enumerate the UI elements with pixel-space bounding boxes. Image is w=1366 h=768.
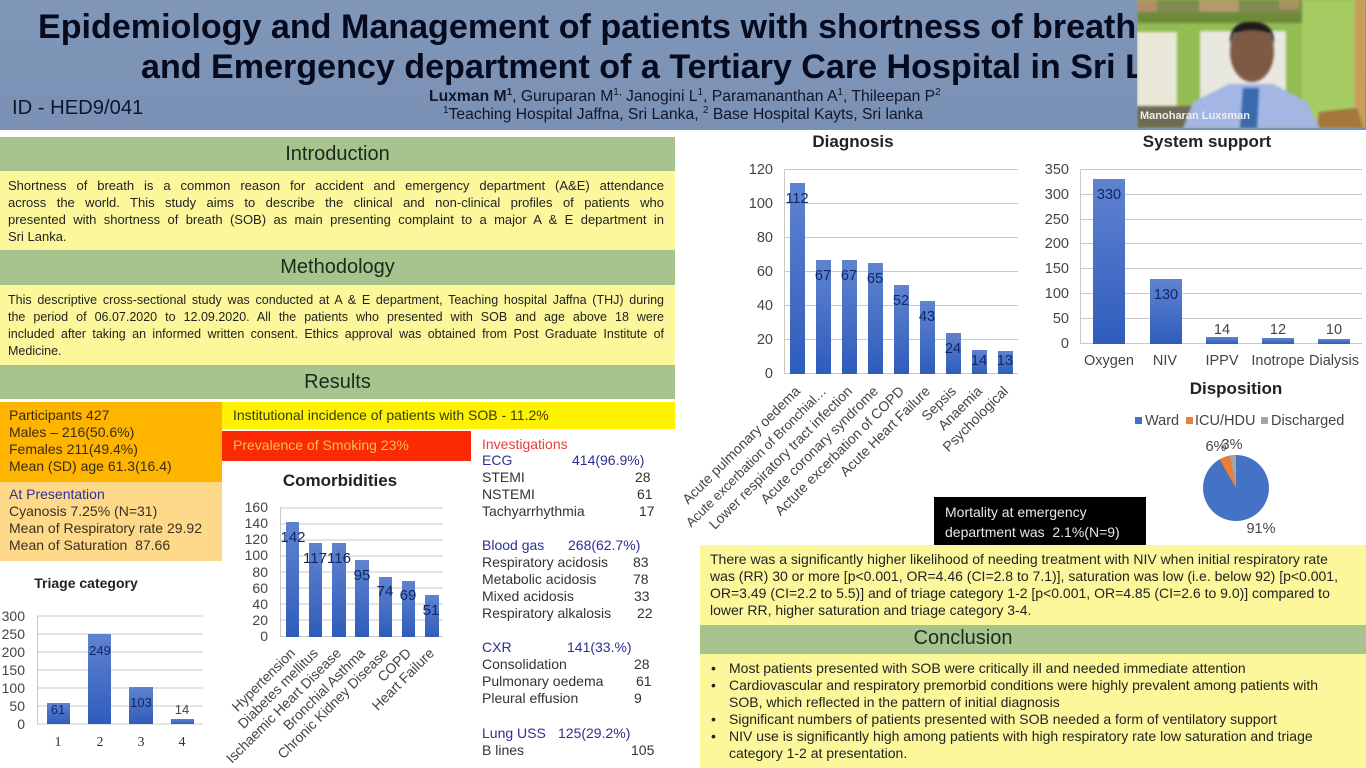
- conclusion list: [700, 654, 1366, 768]
- callout: institutional incidence: Institutional incidence of patients with SOB - 11.2%: [233, 407, 549, 423]
- comorbidities chart title: Comorbidities: [283, 471, 397, 490]
- webcam presenter video: [1137, 0, 1365, 128]
- disposition legend: Discharged: [1271, 413, 1344, 429]
- chart: triage category: 249: [89, 643, 111, 658]
- chart: comorbidities: Hypertension: [228, 645, 298, 714]
- chart: diagnosis: 43: [919, 309, 935, 325]
- conclusion list: category 1-2 at presentation.: [729, 745, 907, 761]
- conclusion list: •: [711, 677, 716, 693]
- investigations list: Lung USS: [482, 725, 546, 741]
- disposition legend: Ward: [1145, 413, 1179, 429]
- chart: diagnosis: 67: [815, 268, 831, 284]
- chart: diagnosis: 120: [749, 162, 773, 178]
- chart: diagnosis: [679, 132, 1018, 532]
- chart: comorbidities: 69: [400, 587, 416, 604]
- investigations list: 28: [634, 656, 650, 672]
- investigations list: Metabolic acidosis: [482, 571, 596, 587]
- heading: methodology: [0, 250, 675, 285]
- chart: diagnosis: Actute excerbation of COPD: [771, 383, 907, 518]
- findings text: was (RR) 30 or more [p<0.001, OR=4.46 (CI=2.8 to 7.1)], saturation was low (i.e. below 92) [p<0.001,: [710, 568, 1338, 584]
- chart: comorbidities: 0: [260, 628, 268, 644]
- investigations list: 17: [639, 503, 655, 519]
- investigations list: 125(29.2%): [558, 725, 630, 741]
- header band: [0, 0, 1366, 130]
- investigations list: Tachyarrhythmia: [482, 503, 585, 519]
- chart: comorbidities: COPD: [374, 645, 414, 685]
- chart: diagnosis: 100: [749, 196, 773, 212]
- investigations list: B lines: [482, 742, 524, 758]
- chart: triage category: 2: [96, 735, 104, 750]
- investigations list: 105: [631, 742, 654, 758]
- chart: comorbidities: Chronic Kidney Disease: [274, 645, 391, 762]
- investigations list: NSTEMI: [482, 486, 535, 502]
- chart: triage category: 103: [130, 695, 152, 710]
- conclusion list: •: [711, 660, 716, 676]
- chart: disposition pie: 6%: [1206, 439, 1227, 455]
- heading: results: Results: [304, 371, 371, 393]
- conclusion list: •: [711, 711, 716, 727]
- introduction text: [0, 171, 675, 250]
- participants box: Participants 427: [9, 407, 109, 423]
- investigations list: Investigations: [482, 436, 568, 452]
- chart: system support: 0: [1061, 336, 1069, 352]
- chart: system support: NIV: [1153, 353, 1177, 369]
- chart: comorbidities: 20: [252, 612, 268, 628]
- callout: smoking prevalence: [222, 431, 471, 461]
- chart: comorbidities: 74: [377, 583, 393, 600]
- callout: smoking prevalence: Prevalence of Smoking 23%: [233, 437, 409, 453]
- panel: methodology: [0, 250, 675, 365]
- investigations list: Blood gas: [482, 537, 544, 553]
- chart: diagnosis: 0: [765, 366, 773, 382]
- investigations list: 83: [633, 554, 649, 570]
- chart: diagnosis: 60: [757, 264, 773, 280]
- investigations list: Pulmonary oedema: [482, 673, 603, 689]
- conclusion list: SOB, which reflected in the pattern of initial diagnosis: [729, 694, 1060, 710]
- chart: comorbidities: 160: [245, 499, 268, 515]
- conclusion list: NIV use is significantly high among patients with high respiratory rate low saturation and triage: [729, 728, 1313, 744]
- methodology text: [0, 285, 675, 365]
- chart: system support: IPPV: [1205, 353, 1239, 369]
- heading: results: [0, 365, 675, 399]
- chart: system support: 50: [1053, 311, 1069, 327]
- chart: system support: 12: [1270, 322, 1286, 338]
- methodology text: Medicine.: [8, 344, 62, 358]
- chart: comorbidities: 100: [245, 547, 268, 563]
- conclusion list: •: [711, 728, 716, 744]
- conclusion list: Cardiovascular and respiratory premorbid conditions were highly prevalent among patients with: [729, 677, 1318, 693]
- chart: triage category: 61: [51, 702, 65, 717]
- at presentation box: [0, 482, 222, 561]
- chart: triage category: 1: [54, 735, 62, 750]
- investigations list: 61: [636, 673, 652, 689]
- diagnosis chart title: Diagnosis: [812, 132, 894, 151]
- chart: system support: 200: [1045, 236, 1069, 252]
- chart: system support: 150: [1045, 261, 1069, 277]
- investigations list: 33: [634, 588, 650, 604]
- chart: diagnosis: 14: [971, 353, 987, 369]
- investigations list: 9: [634, 690, 642, 706]
- chart: triage category: 300: [2, 608, 25, 624]
- panel: introduction: [0, 137, 675, 250]
- methodology text: included after taking an informed written consent. Ethics approval was obtained from Post Graduate Institute of: [8, 327, 664, 341]
- chart: diagnosis: Acute coronary syndrome: [757, 383, 881, 507]
- chart: system support: Oxygen: [1084, 353, 1134, 369]
- chart: diagnosis: Anaemia: [935, 383, 985, 433]
- pie slices: [1203, 455, 1269, 521]
- investigations list: Respiratory acidosis: [482, 554, 608, 570]
- investigations list: STEMI: [482, 469, 525, 485]
- callout: mortality: department was 2.1%(N=9): [945, 524, 1120, 540]
- callout: mortality: Mortality at emergency: [945, 504, 1087, 520]
- chart: disposition pie: [1135, 379, 1344, 537]
- chart: comorbidities: Diabetes mellitus: [234, 645, 321, 732]
- heading: conclusion: [700, 625, 1366, 654]
- chart: diagnosis: 13: [997, 353, 1013, 369]
- chart: comorbidities: 142: [280, 529, 306, 546]
- chart: diagnosis: Acute pulmonary oedema: [679, 383, 803, 507]
- introduction text: presented with shortness of breath (SOB) as main presenting complaint to a major A & E department in: [8, 212, 664, 227]
- chart: triage category: 200: [2, 644, 25, 660]
- chart: triage category: 0: [17, 716, 25, 732]
- disposition legend: [1135, 413, 1344, 429]
- callout: institutional incidence: [222, 402, 675, 429]
- investigations list: Respiratory alkalosis: [482, 605, 611, 621]
- chart: triage category: 14: [175, 702, 189, 717]
- investigations list: Consolidation: [482, 656, 567, 672]
- investigations list: 22: [637, 605, 653, 621]
- title: and Emergency department of a Tertiary Care Hospital in Sri Lanka: [141, 48, 1224, 86]
- chart: diagnosis: 112: [785, 191, 809, 207]
- chart: diagnosis: 40: [757, 298, 773, 314]
- chart: system support: 14: [1214, 322, 1230, 338]
- investigations list: ECG: [482, 452, 512, 468]
- chart: system support: Inotrope: [1251, 353, 1305, 369]
- affiliations: 1Teaching Hospital Jaffna, Sri Lanka, 2 Base Hospital Kayts, Sri lanka: [443, 105, 923, 123]
- chart: diagnosis: 52: [893, 293, 909, 309]
- methodology text: the period of 06.07.2020 to 12.09.2020. All the patients who presented with SOB and age above 18 were: [8, 310, 664, 324]
- findings text: OR=3.49 (CI=2.2 to 5.5)] and of triage category 1-2 [p<0.001, OR=4.85 (CI=2.6 to 9.0)] compared to: [710, 585, 1330, 601]
- chart: diagnosis: 67: [841, 268, 857, 284]
- chart: comorbidities: 117: [303, 550, 327, 567]
- chart: system support: 330: [1097, 187, 1121, 203]
- disposition chart title: Disposition: [1190, 379, 1282, 398]
- chart: comorbidities: 95: [354, 567, 370, 584]
- at presentation box: Mean of Respiratory rate 29.92: [9, 520, 202, 536]
- title: [38, 8, 1328, 86]
- chart: comorbidities: [223, 471, 443, 766]
- chart: diagnosis: Acute Heart Failure: [837, 383, 933, 479]
- heading: introduction: [0, 137, 675, 171]
- chart: system support: 100: [1045, 286, 1069, 302]
- introduction text: Sri Lanka.: [8, 229, 67, 244]
- heading: conclusion: Conclusion: [914, 627, 1012, 649]
- chart: triage category: 4: [178, 735, 186, 750]
- callout: mortality: [934, 497, 1146, 545]
- disposition legend: ICU/HDU: [1195, 413, 1255, 429]
- investigations list: CXR: [482, 639, 512, 655]
- conclusion list: Most patients presented with SOB were critically ill and needed immediate attention: [729, 660, 1246, 676]
- participants box: Males – 216(50.6%): [9, 424, 134, 440]
- investigations list: Pleural effusion: [482, 690, 578, 706]
- chart: comorbidities: Bronchial Asthma: [280, 645, 368, 733]
- chart: triage category: 250: [2, 626, 25, 642]
- chart: diagnosis: 65: [867, 271, 883, 287]
- chart: system support: 10: [1326, 322, 1342, 338]
- conclusion list: Significant numbers of patients presented with SOB needed a form of ventilatory support: [729, 711, 1277, 727]
- investigations list: 268(62.7%): [568, 537, 640, 553]
- investigations list: 28: [635, 469, 651, 485]
- chart: diagnosis: Acute excerbation of Bronchial…: [683, 384, 829, 530]
- chart: system support: 350: [1045, 162, 1069, 178]
- chart: triage category: 100: [2, 680, 25, 696]
- introduction text: across the world. This study aims to describe the clinical and non-clinical profiles of patients who: [8, 195, 664, 210]
- authors: Luxman M1, Guruparan M1, Janogini L1, Paramananthan A1, Thileepan P2: [429, 87, 941, 105]
- chart: triage category: 50: [9, 698, 25, 714]
- chart: comorbidities: Heart Failure: [369, 645, 437, 713]
- heading: introduction: Introduction: [285, 143, 390, 165]
- chart: comorbidities: 51: [423, 602, 439, 619]
- findings text: There was a significantly higher likelihood of needing treatment with NIV when initial respiratory rate: [710, 551, 1328, 567]
- chart: triage category: 3: [138, 735, 144, 750]
- chart: diagnosis: Lower respiratory tract infection: [706, 383, 855, 532]
- investigations list: 141(33.%): [567, 639, 632, 655]
- participants box: Females 211(49.4%): [9, 441, 138, 457]
- system support chart title: System support: [1143, 132, 1272, 151]
- investigations list: [482, 436, 655, 758]
- at presentation box: Cyanosis 7.25% (N=31): [9, 503, 157, 519]
- participants box: Mean (SD) age 61.3(16.4): [9, 458, 172, 474]
- investigations list: Mixed acidosis: [482, 588, 574, 604]
- chart: system support: 250: [1045, 212, 1069, 228]
- chart: comorbidities: 140: [245, 515, 268, 531]
- chart: triage category: [2, 575, 203, 750]
- chart: comorbidities: 60: [252, 580, 268, 596]
- chart: system support: [1045, 132, 1362, 369]
- poster id: ID - HED9/041: [12, 97, 143, 119]
- findings text: lower RR, higher saturation and triage category 3-4.: [710, 602, 1031, 618]
- introduction text: Shortness of breath is a common reason for accident and emergency department (A&E) attendance: [8, 178, 664, 193]
- chart: system support: 300: [1045, 187, 1069, 203]
- triage chart title: Triage category: [34, 575, 138, 591]
- chart: system support: Dialysis: [1309, 353, 1359, 369]
- chart: diagnosis: Sepsis: [918, 383, 959, 424]
- heading: methodology: Methodology: [280, 256, 395, 278]
- participants box: [0, 402, 222, 482]
- chart: diagnosis: Psychological: [939, 383, 1011, 455]
- chart: comorbidities: 116: [327, 550, 351, 567]
- investigations list: 61: [637, 486, 653, 502]
- at presentation box: Mean of Saturation 87.66: [9, 537, 170, 553]
- methodology text: This descriptive cross-sectional study was conducted at A & E department, Teaching hospital Jaffna (THJ) during: [8, 293, 664, 307]
- chart: comorbidities: 80: [252, 564, 268, 580]
- chart: diagnosis: 80: [757, 230, 773, 246]
- chart: disposition pie: 91%: [1246, 521, 1276, 537]
- title: Epidemiology and Management of patients with shortness of breath in Accident: [38, 8, 1328, 46]
- chart: comorbidities: 120: [245, 531, 268, 547]
- at presentation box: At Presentation: [9, 486, 105, 502]
- chart: disposition pie: 3%: [1222, 437, 1243, 453]
- chart: diagnosis: 20: [757, 332, 773, 348]
- investigations list: 414(96.9%): [572, 452, 644, 468]
- chart: comorbidities: Ischaemic Heart Disease: [223, 645, 344, 766]
- chart: system support: 130: [1154, 287, 1178, 303]
- presenter name: Manoharan Luxsman: [1140, 110, 1250, 122]
- investigations list: 78: [633, 571, 649, 587]
- chart: triage category: 150: [2, 662, 25, 678]
- chart: diagnosis: 24: [945, 341, 961, 357]
- chart: comorbidities: 40: [252, 596, 268, 612]
- findings text: [700, 545, 1366, 625]
